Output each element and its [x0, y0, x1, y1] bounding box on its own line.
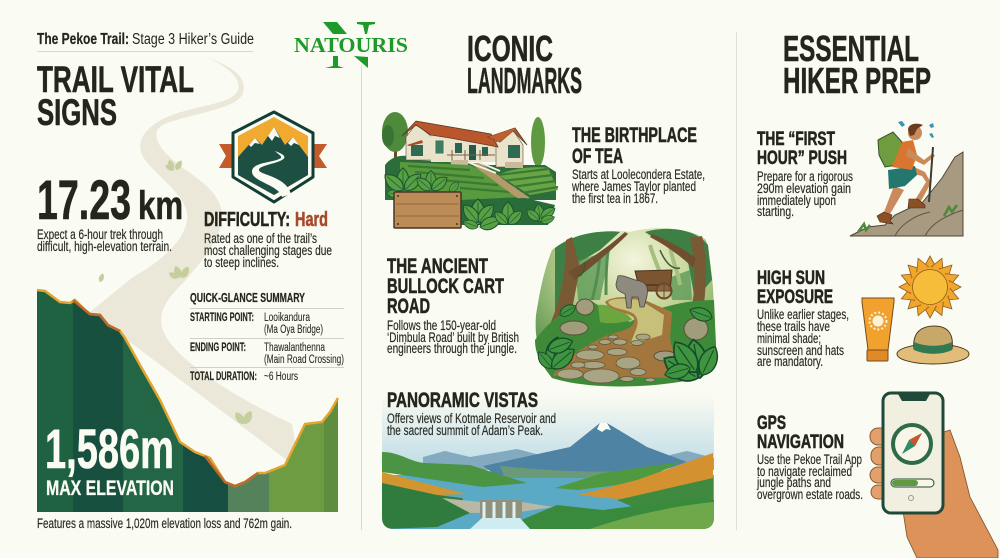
- distance stat: Expect a 6-hour trek through: [37, 227, 163, 242]
- gps navigation text: overgrown estate roads.: [757, 487, 863, 502]
- heading: essential hiker prep: [783, 28, 931, 101]
- bullock cart road text: ROAD: [387, 295, 430, 318]
- high sun exposure text: HIGH SUN: [757, 268, 825, 289]
- panel: iconic landmarks: LANDMARKS: [467, 60, 582, 101]
- column divider right: [736, 32, 737, 530]
- logo: Natouris: [294, 22, 408, 68]
- quick-glance summary: STARTING POINT:: [190, 312, 254, 324]
- gps navigation text: NAVIGATION: [757, 432, 844, 453]
- panoramic vistas text: Offers views of Kotmale Reservoir and: [387, 411, 556, 426]
- gps navigation text: [756, 413, 863, 502]
- high sun exposure text: EXPOSURE: [757, 287, 833, 308]
- column divider left: [361, 66, 362, 530]
- first hour push text: immediately upon: [757, 193, 836, 208]
- distance stat: 17.23: [37, 168, 131, 231]
- bullock cart road text: Follows the 150-year-old: [387, 318, 496, 333]
- bullock cart road text: engineers through the jungle.: [387, 341, 517, 356]
- icon: sun: [899, 256, 961, 318]
- elevation caption: Features a massive 1,020m elevation loss and 762m gain.: [37, 516, 292, 531]
- icon: difficulty badge: [219, 112, 327, 202]
- elevation chart: 1,586m: [45, 417, 174, 480]
- header line: Stage 3 Hiker’s Guide: [132, 31, 254, 48]
- heading: trail vital signs: TRAIL VITAL: [37, 59, 194, 100]
- header line: [37, 31, 254, 52]
- distance stat: km: [138, 184, 183, 228]
- quick-glance summary: Thawalanthenna: [264, 342, 325, 354]
- heading: iconic landmarks: [467, 28, 582, 101]
- difficulty text: to steep inclines.: [204, 255, 279, 270]
- heading: trail vital signs: SIGNS: [37, 92, 117, 133]
- birthplace of tea text: Starts at Loolecondera Estate,: [572, 167, 705, 182]
- high sun exposure text: Unlike earlier stages,: [757, 307, 849, 322]
- quick-glance summary: Looikandura: [264, 312, 310, 324]
- first hour push text: [757, 129, 853, 219]
- elevation chart: [37, 290, 338, 512]
- illustration: jungle cart road: [534, 228, 723, 387]
- difficulty text: [204, 209, 332, 270]
- panoramic vistas text: [387, 389, 556, 438]
- birthplace of tea text: where James Taylor planted: [571, 179, 696, 194]
- header line: The Pekoe Trail:: [37, 31, 129, 48]
- logo: Natouris: NATOURIS: [294, 33, 408, 57]
- illustration: tea estate bungalow: [381, 112, 558, 232]
- quick-glance summary: QUICK-GLANCE SUMMARY: [190, 290, 305, 305]
- gps navigation text: Use the Pekoe Trail App: [757, 452, 862, 467]
- panoramic vistas text: PANORAMIC VISTAS: [387, 389, 538, 412]
- high sun exposure text: [757, 268, 849, 369]
- difficulty text: most challenging stages due: [204, 243, 332, 258]
- illustration: reservoir and Adam's Peak: [382, 395, 714, 529]
- bullock cart road text: THE ANCIENT: [387, 255, 488, 278]
- panel: iconic landmarks: [381, 28, 723, 529]
- birthplace of tea text: OF TEA: [572, 145, 623, 168]
- panel: essential hiker prep: [756, 28, 998, 558]
- bullock cart road text: [387, 255, 519, 356]
- high sun exposure text: these trails have: [757, 319, 830, 334]
- first hour push text: HOUR” PUSH: [757, 148, 847, 169]
- elevation chart: MAX ELEVATION: [46, 477, 174, 500]
- difficulty text: Rated as one of the trail’s: [204, 231, 317, 246]
- first hour push text: 290m elevation gain: [757, 181, 851, 196]
- birthplace of tea text: THE BIRTHPLACE: [572, 124, 697, 147]
- icon: sunscreen tube: [862, 298, 894, 361]
- quick-glance summary: ~6 Hours: [264, 371, 298, 383]
- heading: essential hiker prep: HIKER PREP: [783, 60, 931, 101]
- panel: trail vital signs: [37, 31, 344, 531]
- difficulty text: DIFFICULTY:: [204, 209, 290, 231]
- quick-glance summary: (Main Road Crossing): [264, 354, 344, 366]
- winding trail background: [90, 58, 300, 470]
- quick-glance summary: TOTAL DURATION:: [190, 371, 257, 383]
- bullock cart road text: BULLOCK CART: [387, 275, 504, 298]
- first hour push text: Prepare for a rigorous: [757, 169, 853, 184]
- quick-glance summary: [190, 290, 344, 383]
- heading: essential hiker prep: ESSENTIAL: [783, 28, 919, 69]
- birthplace of tea text: the first tea in 1867.: [572, 191, 658, 206]
- high sun exposure text: are mandatory.: [757, 354, 823, 369]
- difficulty text: Hard: [295, 209, 328, 231]
- first hour push text: starting.: [757, 204, 794, 219]
- quick-glance summary: ENDING POINT:: [190, 342, 246, 354]
- birthplace of tea text: [571, 124, 705, 206]
- panoramic vistas text: the sacred summit of Adam’s Peak.: [387, 423, 543, 438]
- gps navigation text: jungle paths and: [756, 475, 831, 490]
- distance stat: difficult, high-elevation terrain.: [37, 239, 172, 254]
- illustration: hand holding phone: [870, 393, 998, 558]
- illustration: hiker on rocks: [850, 121, 963, 236]
- small leaf sprigs: [98, 159, 254, 426]
- icon: sun hat: [897, 326, 969, 364]
- heading: trail vital signs: [37, 59, 194, 133]
- quick-glance summary: (Ma Oya Bridge): [264, 324, 323, 336]
- high sun exposure text: sunscreen and hats: [757, 343, 844, 358]
- bullock cart road text: ‘Dimbula Road’ built by British: [387, 330, 519, 345]
- first hour push text: THE “FIRST: [757, 129, 835, 150]
- high sun exposure text: minimal shade;: [757, 331, 821, 346]
- gps navigation text: GPS: [757, 413, 786, 434]
- heading: iconic landmarks: ICONIC: [467, 28, 553, 69]
- gps navigation text: to navigate reclaimed: [757, 464, 852, 479]
